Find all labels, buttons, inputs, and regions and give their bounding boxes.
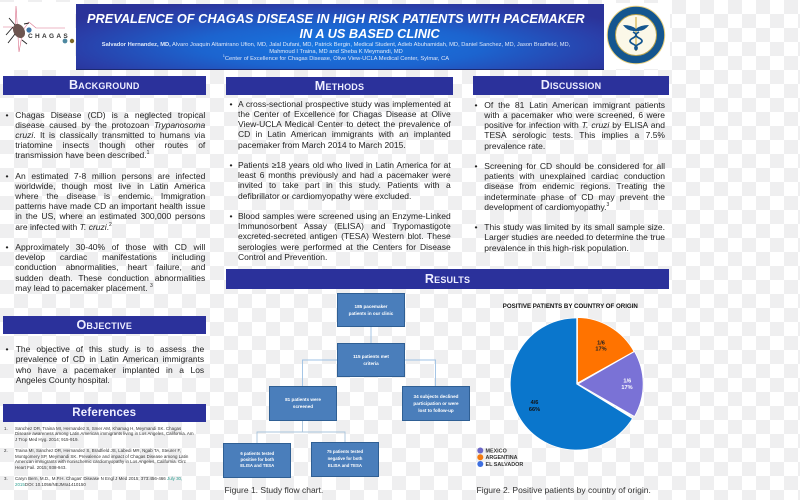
- authors: 1Center of Excellence for Chagas Disease, Olive View-UCLA Medical Center, Sylmar, CA: [223, 54, 449, 62]
- text: discussion bullets: Screening for CD should be considered for all: [484, 161, 665, 171]
- text: methods bullets: •: [230, 160, 233, 170]
- text: objective: prevalence of CD in Latin American immigrants: [16, 354, 204, 364]
- heading: Methods: [226, 76, 453, 95]
- flow box: 34 declined: [402, 386, 470, 421]
- caption: figure 1: Figure 1. Study flow chart.: [224, 484, 323, 494]
- text: background bullets: •: [6, 110, 9, 120]
- text: references list: Caryn Bern, M.D., M.P.H. Chagas' Disease N Engl J Med 2015; 373:456-466 July 30,: [15, 476, 182, 481]
- right logo: seal: [604, 3, 670, 69]
- heading: Objective: Objective: [76, 318, 132, 332]
- flow box: 81 screened: [269, 386, 337, 421]
- title: IN A US BASED CLINIC: [300, 26, 440, 41]
- text: methods bullets: Patients ≥18 years old who lived in Latin America for at: [238, 160, 451, 170]
- text: background bullets: Chagas Disease (CD) is a neglected tropical: [15, 110, 205, 120]
- text: background bullets: develop cardiac manifestations including: [15, 252, 205, 262]
- chart: study flow chart: [223, 293, 470, 478]
- authors: Mahmoud I Traina, MD and Sheba K Meymandi, MD: [269, 49, 403, 55]
- heading: References: References: [72, 407, 136, 419]
- text: background bullets: triatomine insects though other routes of: [15, 140, 205, 150]
- flow box: 6 positive: positive for both: [240, 457, 274, 462]
- text: discussion bullets: Larger studies are needed to determine the true: [484, 232, 665, 242]
- text: references list: 3.: [4, 476, 8, 481]
- slice: El Salvador: [510, 318, 632, 450]
- text: methods bullets: excreted-secreted antigen (TESA) Western blot. These: [238, 231, 451, 241]
- text: methods bullets: Control and Prevention.: [238, 252, 327, 262]
- text: discussion bullets: patients with unexplained cardiac conduction: [484, 171, 665, 181]
- text: background bullets: may lead to pacemaker placement. 3: [15, 283, 153, 293]
- text: discussion bullets: TESA serologic tests. This implies a 7.5%: [484, 130, 665, 140]
- text: methods bullets: Immunosorbent Assay (ELISA) and Trypomastigote: [238, 221, 451, 231]
- chart title: POSITIVE PATIENTS BY COUNTRY OF ORIGIN: [503, 303, 638, 310]
- text: methods bullets: A cross-sectional prospective study was implemented at: [238, 99, 451, 109]
- heading: Discussion: Discussion: [541, 78, 601, 92]
- legend: ARGENTINA: [486, 455, 518, 461]
- heading: Background: [2, 76, 206, 95]
- text: discussion bullets: [474, 100, 665, 253]
- slice labels: 66%: [529, 407, 540, 413]
- title: [87, 10, 585, 41]
- text: discussion bullets: prevalence in this high-risk population.: [484, 243, 629, 253]
- flow box: 75 negative: negative for both: [328, 456, 362, 461]
- text: background bullets: cruzi. It is classically transmitted to humans via: [15, 130, 205, 140]
- text: background bullets: An estimated 7-8 million persons are infected: [15, 171, 205, 181]
- text: objective: who have a pacemaker implanted in a Los: [16, 365, 204, 375]
- flow box: 185 pacemaker patients: 185 pacemaker: [355, 304, 387, 309]
- left logo: Chagas: [0, 2, 75, 70]
- flow box: 34 declined: lost to follow-up: [418, 408, 454, 413]
- flow box: 75 negative: ELISA and TESA: [328, 463, 362, 468]
- flow box: 185 pacemaker patients: patients in our clinic: [349, 311, 393, 316]
- flow box: 34 declined: participation or were: [413, 401, 459, 406]
- text: references list: 2.: [4, 448, 8, 453]
- text: methods bullets: CD in Latin American immigrants with an implanted: [238, 129, 451, 139]
- heading: Methods: Methods: [315, 78, 364, 92]
- flow box: 75 negative: [311, 442, 379, 477]
- text: methods bullets: serologies were performed at the Centers for Disease: [238, 242, 451, 252]
- text: discussion bullets: development of cardiomyopathy.3: [484, 202, 609, 212]
- flow box: 34 declined: 34 subjects declined: [414, 394, 458, 399]
- text: references list: American immigrants with nonischemic cardiomyopathy in Los Angeles, California. Circ: [15, 459, 186, 464]
- flow box: 115 met criteria: 115 patients met: [353, 354, 389, 359]
- text: discussion bullets: Of the 81 Latin American immigrant patients: [484, 100, 665, 110]
- flow box: 6 positive: 6 patients tested: [240, 451, 274, 456]
- chart: pie of positive patients by country: [477, 303, 644, 468]
- slice labels: [529, 340, 633, 413]
- text: discussion bullets: This study was limited by its small sample size.: [484, 222, 665, 232]
- flow connectors: [256, 327, 436, 443]
- authors: Salvador Hernandez, MD, Alvaro Joaquin Altamirano Ufion, MD, Jalal Dufani, MD, Patrick Bergin, Medical Student, Adieb Abuhamidah, MD, Daniel Sanchez, MD, Jason Bradfield, MD,: [102, 42, 570, 48]
- text: background bullets: patterns have made CD an important health issue: [15, 201, 205, 211]
- text: methods bullets: the Center of Excellence for Chagas Disease at Olive: [238, 109, 451, 119]
- flow box: 6 positive: ELISA and TESA: [240, 463, 274, 468]
- flow box: 6 positive: [223, 443, 291, 478]
- text: methods bullets: Blood samples were screened using an Enzyme-Linked: [238, 211, 451, 221]
- text: background bullets: worldwide, though most live in Latin America: [15, 181, 205, 191]
- text: references list: [4, 426, 194, 487]
- text: discussion bullets: positive for infection with T. cruzi by ELISA and: [484, 120, 665, 130]
- text: discussion bullets: •: [474, 222, 478, 232]
- flow box: 81 screened: 81 patients were: [285, 397, 321, 402]
- slice labels: 4/6: [531, 400, 538, 406]
- text: references list: Traina MI, Sanchez DR, Hernandez S, Bradfield JS, Labedi MR, Ngab TA, Steurer F,: [15, 448, 181, 453]
- text: background bullets: Approximately 30-40% of those with CD will: [15, 242, 205, 252]
- heading: Discussion: [473, 76, 669, 95]
- heading: References: [2, 404, 206, 422]
- text: references list: J Trop Med Hyg. 2014; 915-919.: [15, 437, 79, 442]
- heading: Background: Background: [69, 78, 140, 92]
- text: references list: Sanchez DR, Traina MI, Hernandez S, Smer AM, Khamag H, Meymandi SK. Chagas: [15, 426, 181, 431]
- text: objective: The objective of this study is to assess the: [16, 344, 204, 354]
- text: background bullets: disease caused by the protozoan Trypanosoma: [15, 120, 205, 130]
- text: discussion bullets: with a pacemaker who were screened, 6 were: [484, 110, 665, 120]
- text: background bullets: where the disease is endemic. Immigration: [15, 191, 205, 201]
- slice labels: 1/6: [623, 378, 631, 384]
- left logo: Chagas: CHAGAS: [28, 33, 70, 40]
- text: objective: •: [6, 344, 9, 354]
- text: background bullets: transmission have been described.1: [15, 150, 149, 160]
- heading: Results: Results: [425, 272, 470, 286]
- text: background bullets: conduction abnormalities, heart failure, and: [15, 262, 205, 272]
- text: background bullets: are infected with T. cruzi.2: [15, 222, 112, 232]
- text: references list: 1.: [4, 426, 8, 431]
- flow box: 75 negative: 75 patients tested: [327, 449, 363, 454]
- text: discussion bullets: •: [474, 161, 478, 171]
- text: discussion bullets: disease from endemic regions. Treating the: [484, 181, 665, 191]
- text: references list: Montgomery SP, Meymandi SK. Prevalence and impact of Chagas Disease among Latin: [15, 454, 188, 459]
- text: methods bullets: [230, 99, 451, 262]
- heading: Results: [226, 269, 669, 289]
- text: methods bullets: •: [230, 211, 233, 221]
- slice: Mexico: [578, 352, 643, 416]
- slice labels: 1/6: [597, 340, 605, 346]
- slice labels: 17%: [621, 385, 633, 391]
- flow box: 115 met criteria: [337, 343, 405, 377]
- slice labels: 17%: [595, 346, 607, 352]
- text: methods bullets: invited to take part in this study. Patients with a: [238, 180, 451, 190]
- text: objective: [6, 344, 204, 385]
- title: PREVALENCE OF CHAGAS DISEASE IN HIGH RISK PATIENTS WITH PACEMAKER: [87, 10, 585, 26]
- text: methods bullets: defibrillator or cardiomyopathy were excluded.: [238, 191, 411, 201]
- text: background bullets: •: [6, 171, 9, 181]
- text: references list: 2015DOI: 10.1056/NEJMra1410150: [15, 482, 86, 487]
- text: background bullets: in the US, where an estimated 300,000 persons: [15, 211, 205, 221]
- legend: [477, 448, 523, 468]
- text: methods bullets: least 6 months previously and had a pacemaker were: [238, 170, 451, 180]
- text: methods bullets: •: [230, 99, 233, 109]
- flow box: 115 met criteria: criteria: [363, 361, 379, 366]
- legend: MEXICO: [486, 448, 507, 454]
- flow box: 185 pacemaker patients: [337, 293, 405, 327]
- text: discussion bullets: prevalence rate.: [484, 141, 545, 151]
- text: references list: Heart Fail. 2015; 938-943.: [15, 465, 67, 470]
- flow box: 81 screened: screened: [293, 404, 313, 409]
- text: background bullets: sudden death. These conduction abnormalities: [15, 273, 205, 283]
- legend: EL SALVADOR: [486, 462, 523, 468]
- authors: [102, 42, 570, 62]
- text: background bullets: •: [6, 242, 9, 252]
- text: discussion bullets: •: [474, 100, 478, 110]
- heading: Objective: [2, 316, 206, 334]
- caption: figure 2: Figure 2. Positive patients by country of origin.: [476, 484, 651, 494]
- text: discussion bullets: indeterminate phase of CD may prevent the: [484, 192, 665, 202]
- slice: Argentina: [578, 318, 634, 383]
- title banner: [76, 4, 604, 70]
- text: background bullets: [6, 110, 206, 293]
- text: methods bullets: View-UCLA Medical Center to detect the prevalence of: [238, 119, 451, 129]
- text: objective: Angeles County hospital.: [16, 375, 110, 385]
- text: references list: Disease awareness among Latin American immigrants living in Los Angeles, California. Am: [15, 431, 194, 436]
- text: methods bullets: pacemaker from March 2014 to March 2015.: [238, 140, 406, 150]
